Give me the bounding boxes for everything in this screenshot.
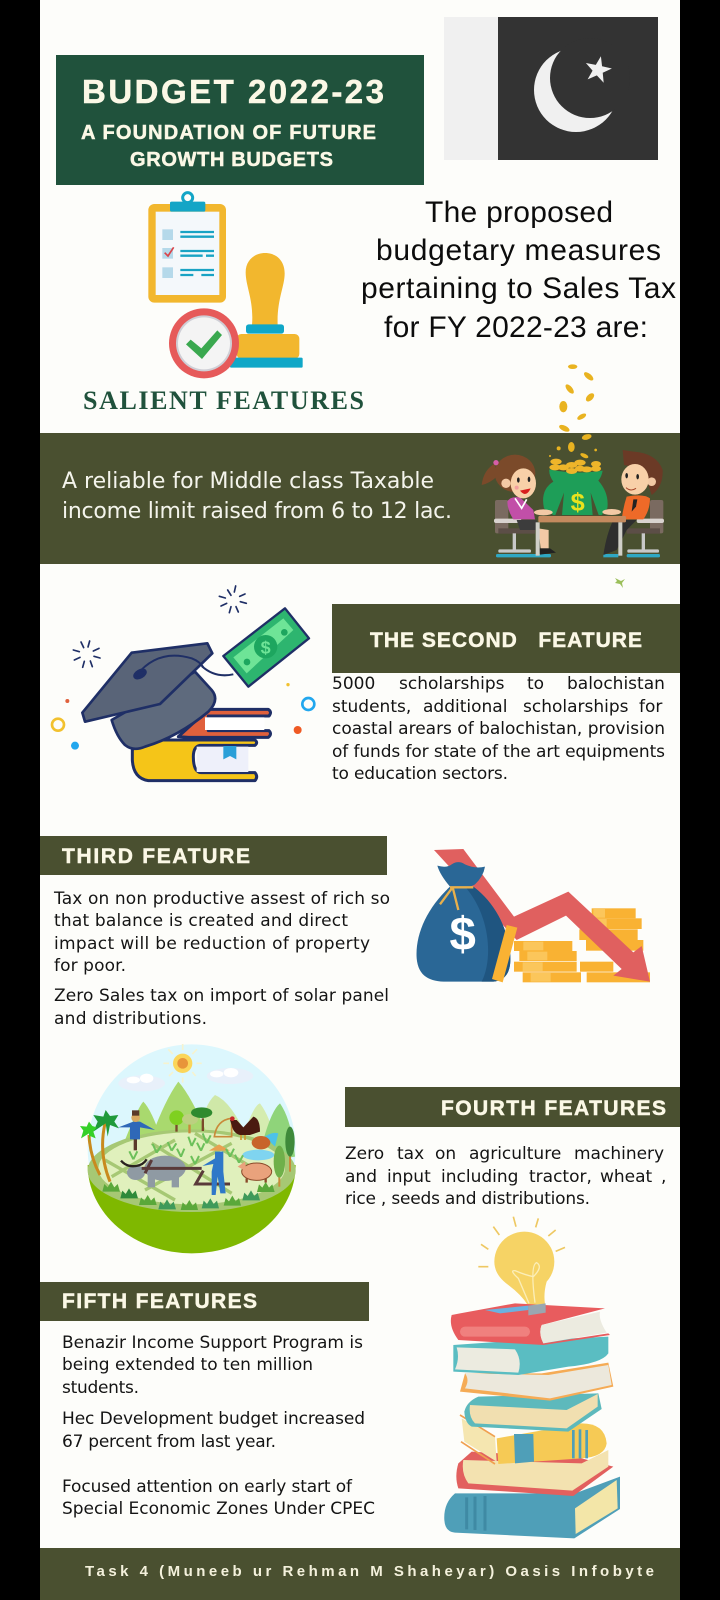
- book stack: [132, 709, 271, 781]
- text: hec development budget: Hec Development budget increased: [62, 1409, 365, 1429]
- bulb: [478, 1217, 565, 1305]
- cage and rooster: [214, 1116, 260, 1140]
- text: benazir income support: [62, 1333, 363, 1398]
- text: scholarships: balochistan: [567, 674, 665, 694]
- text: middle class income limit: income limit raised from 6 to 12 lac.: [62, 499, 452, 524]
- text: benazir income support: Benazir Income Support Program is: [62, 1333, 363, 1353]
- text: tax on non productive assets: impact will be reduction of property: [54, 934, 370, 954]
- heading: salient features: SALIENT FEATURES: [83, 386, 364, 415]
- text: zero tax on agriculture: rice , seeds and distributions.: [345, 1189, 590, 1209]
- heading: fifth features: FIFTH FEATURES: [62, 1290, 257, 1313]
- grass tufts: [102, 1182, 275, 1210]
- text: tax on non productive assets: Tax on non productive assest of rich so: [53, 889, 390, 909]
- coloured dots: [52, 683, 314, 750]
- text: tax on non productive assets: Zero Sales tax on import of solar panel: [54, 986, 389, 1006]
- text: scholarships: for: [639, 697, 662, 717]
- money bag: $: [571, 489, 585, 517]
- text: tax on non productive assets: for poor.: [54, 956, 126, 976]
- heading: fourth features: FOURTH FEATURES: [441, 1097, 666, 1120]
- woman: [482, 455, 556, 555]
- red and cream book: [456, 1450, 613, 1496]
- bottom blue book: [444, 1477, 620, 1538]
- plough: [196, 1171, 230, 1184]
- text: scholarships: to education sectors.: [332, 764, 508, 784]
- footer band: [40, 1548, 680, 1600]
- red book: [451, 1303, 610, 1345]
- text: tax on non productive assets: [53, 889, 390, 1029]
- farmer: [202, 1144, 230, 1195]
- banknote: $: [261, 637, 271, 657]
- text: middle class income limit: [62, 469, 452, 524]
- panel: second feature: [332, 604, 680, 784]
- pond and fish: [242, 1133, 278, 1160]
- text: benazir income support: students.: [62, 1378, 139, 1398]
- yellow book: [460, 1415, 607, 1464]
- icon: small green sprig: [615, 578, 625, 588]
- coin stacks: [514, 908, 650, 982]
- text: zero tax on agriculture: [345, 1144, 666, 1209]
- footer text: task credit: Task 4 (Muneeb ur Rehman M Shaheyar) Oasis Infobyte: [85, 1563, 654, 1580]
- clouds: [118, 1068, 253, 1091]
- bag: [417, 862, 510, 982]
- text: zero tax on agriculture: Zero: [345, 1144, 384, 1164]
- text: scholarships: coastal arears of balochistan, provision: [332, 719, 665, 739]
- text: scholarships: [332, 674, 665, 784]
- text: special economic zones: Focused attention on early start of: [62, 1477, 353, 1497]
- icon: pakistan flag in greyscale: [444, 17, 658, 160]
- text: middle class income limit: A reliable for Middle class Taxable: [62, 469, 434, 494]
- icon: farm scene in a globe: [80, 1044, 296, 1253]
- palms: [80, 1110, 119, 1182]
- text: special economic zones: Special Economic Zones Under CPEC: [62, 1499, 375, 1519]
- orange book: [460, 1363, 613, 1401]
- man: [602, 450, 663, 555]
- title: budget 2022-23: BUDGET 2022-23: [82, 73, 384, 110]
- subtitle line one: A FOUNDATION OF FUTURE: [81, 122, 376, 144]
- text: tax on non productive assets: that balance is created and direct: [54, 911, 348, 931]
- text: hec development budget: [62, 1409, 365, 1452]
- bag: $: [450, 908, 476, 961]
- text: scholarships: 5000: [332, 674, 375, 694]
- text: zero tax on agriculture: machinery: [574, 1144, 664, 1164]
- text: special economic zones: [62, 1477, 375, 1519]
- text: scholarships: to: [527, 674, 544, 694]
- banknote: [223, 608, 309, 687]
- panel: first feature band: [40, 433, 680, 564]
- rice sprouts: [129, 1133, 243, 1164]
- right trees: [274, 1127, 295, 1187]
- text block: proposed budgetary measures: The proposed: [425, 196, 613, 229]
- text: zero tax on agriculture: including: [441, 1167, 518, 1187]
- ground bowl: [88, 1165, 296, 1253]
- text: zero tax on agriculture: agriculture: [469, 1144, 561, 1164]
- text block: proposed budgetary measures: for FY 2022-23 are:: [384, 311, 648, 344]
- hills: [125, 1082, 295, 1160]
- icon: two people sharing a money bag with falling coins: [482, 364, 664, 557]
- icon: stack of books with light bulb: [444, 1217, 620, 1538]
- teal and cream book: [464, 1393, 602, 1432]
- icon: clipboard and approval stamp: [148, 193, 303, 378]
- fruit trees: [169, 1107, 212, 1133]
- text: zero tax on agriculture: on: [435, 1144, 456, 1164]
- panel: fifth features: [40, 1282, 375, 1519]
- text: scholarships: additional: [423, 697, 507, 717]
- buffalo: [121, 1156, 202, 1187]
- text block: proposed budgetary measures: [361, 196, 676, 344]
- subtitle line two: GROWTH BUDGETS: [130, 149, 333, 171]
- table: [536, 516, 626, 556]
- icon: money bag with falling red arrow and coins: [417, 849, 650, 982]
- text block: proposed budgetary measures: budgetary measures: [376, 234, 661, 267]
- chairs: [494, 500, 664, 557]
- text: scholarships: scholarships: [399, 674, 505, 694]
- heading: the second feature: THE SECOND FEATURE: [370, 629, 642, 652]
- pig: [238, 1162, 272, 1183]
- money bag: [543, 459, 608, 517]
- graduation cap: [82, 643, 215, 749]
- text: tax on non productive assets: and distributions.: [54, 1009, 207, 1029]
- text: benazir income support: being extended to ten million: [62, 1355, 313, 1375]
- text: zero tax on agriculture: tax: [397, 1144, 424, 1164]
- sun: [163, 1044, 202, 1083]
- teal book: [453, 1337, 608, 1375]
- text: zero tax on agriculture: wheat: [600, 1167, 653, 1187]
- panel: title banner: [56, 55, 424, 185]
- text: zero tax on agriculture: tractor,: [529, 1167, 592, 1187]
- red arrow: [434, 849, 650, 982]
- text: zero tax on agriculture: ,: [661, 1167, 666, 1187]
- text: scholarships: scholarships: [523, 697, 629, 717]
- text: zero tax on agriculture: and: [345, 1167, 377, 1187]
- icon: graduation cap on books with banknote: [52, 586, 314, 781]
- panel: third feature: [40, 836, 390, 1029]
- text block: proposed budgetary measures: pertaining to Sales Tax: [361, 272, 676, 305]
- text: scholarships: of funds for state of the art equipments: [332, 742, 665, 762]
- scarecrow: [118, 1110, 155, 1150]
- sparkles: [73, 586, 246, 667]
- text: hec development budget: 67 percent from last year.: [62, 1432, 276, 1452]
- heading: third feature: THIRD FEATURE: [62, 845, 250, 868]
- text: scholarships: students,: [332, 697, 411, 717]
- panel: fourth features: [345, 1087, 680, 1209]
- text: zero tax on agriculture: input: [387, 1167, 431, 1187]
